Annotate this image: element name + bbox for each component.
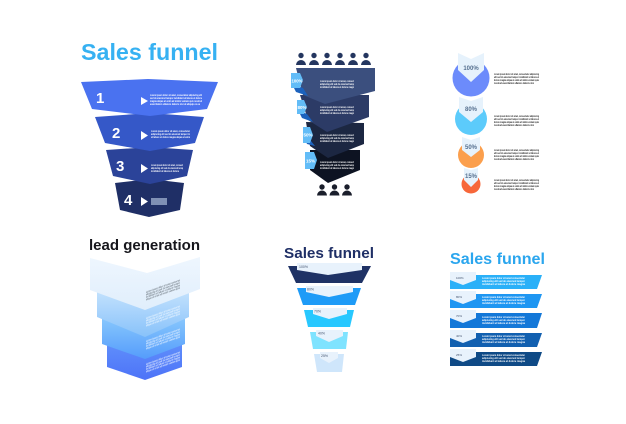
funnel step 3: [106, 147, 193, 184]
panel: numbered funnel: [81, 39, 218, 217]
icons: people bottom: [317, 184, 352, 196]
layer 1: Lorem ipsum dolor sit amet consectet: [146, 278, 180, 294]
panel: lead generation funnel: [89, 237, 200, 380]
funnel step 2: Lorem ipsum dolor sit amet, consectetur: [151, 129, 191, 133]
funnel tier 1: [296, 68, 375, 104]
tier text blocks: Lorem ipsum dolor sit amet, consect: [320, 105, 354, 109]
funnel step 3: adipiscing elit sed do eiusmod temp: [151, 166, 183, 170]
banner: 80%: adipiscing elit sed do eiusmod tempor: [482, 298, 526, 302]
banner: 40%: Lorem ipsum dolor sit amet consectetur: [482, 334, 526, 338]
layer 3: adipiscing elit sed do eiusmod tempor: [146, 330, 181, 345]
banner: 25%: Lorem ipsum dolor sit amet consectetur: [482, 353, 526, 357]
step text blocks: nostrud exercitation ullamco laboris nisi: [494, 187, 534, 191]
banner: 25%: incididunt ut labore et dolore magna: [482, 359, 525, 363]
panel: stacked banners: [450, 251, 545, 366]
badge: 100%: 100%: [292, 78, 302, 84]
funnel step 3: 3: [116, 158, 124, 175]
funnel step 3: Lorem ipsum dolor sit amet, consect: [151, 163, 183, 167]
step: 100% circle: 100%: [463, 66, 479, 72]
banner: 40%: 40%: [456, 334, 462, 338]
step text blocks: dolore magna aliqua ut enim ad minim veniam quis: [494, 120, 539, 124]
funnel tier 2: [300, 95, 369, 132]
badge: 100%: [291, 73, 308, 96]
layer 2: [97, 290, 189, 337]
step text blocks: dolore magna aliqua ut enim ad minim veniam quis: [494, 78, 539, 82]
banner: 100%: adipiscing elit sed do eiusmod tempor: [482, 279, 526, 283]
badge: 50%: [303, 127, 315, 146]
panel: circle funnel: [452, 53, 539, 194]
badge: 50%: 50%: [304, 132, 312, 138]
layer 1: incididunt ut labore et dolore magna: [146, 283, 180, 299]
tier text blocks: incididunt ut labore et dolore magn: [320, 139, 354, 143]
step: 100% circle: [452, 53, 490, 96]
banner: 70%: [450, 310, 542, 328]
layer 4: [107, 344, 182, 380]
funnel step 2: ut labore et dolore magna aliqua ut enim: [151, 135, 190, 139]
layer 3: [102, 319, 185, 359]
step text blocks: Lorem ipsum dolor sit amet, consectetur adipiscing: [494, 72, 539, 76]
tier text blocks: incididunt ut labore et dolore magn: [320, 166, 354, 170]
layer 2: incididunt ut labore et dolore magna: [146, 309, 180, 325]
funnel tier 3: [306, 122, 364, 158]
badge: 15%: 15%: [306, 158, 315, 164]
icons: people top: [296, 53, 371, 65]
layer 1: [90, 257, 200, 310]
step text blocks: Lorem ipsum dolor sit amet, consectetur adipiscing: [494, 148, 539, 152]
banner: 80%: 80%: [456, 295, 462, 299]
tier text blocks: adipiscing elit sed do eiusmod temp: [320, 108, 354, 112]
title: Sales funnel: Sales funnel: [450, 251, 545, 268]
tier text blocks: incididunt ut labore et dolore magn: [320, 85, 354, 89]
tier: 80%: 80%: [307, 288, 314, 292]
step text blocks: nostrud exercitation ullamco laboris nisi: [494, 157, 534, 161]
banner: 100%: [450, 272, 542, 289]
banner: 40%: adipiscing elit sed do eiusmod tempor: [482, 337, 526, 341]
layer 2: aliqua ut enim ad minim veniam quis: [146, 312, 180, 327]
step text blocks: nostrud exercitation ullamco laboris nisi: [494, 81, 534, 85]
funnel step 1: sed do eiusmod tempor incididunt ut labore et dolore: [150, 96, 202, 100]
title: Sales funnel: Sales funnel: [81, 39, 218, 65]
step: 15% circle: 15%: [465, 174, 478, 180]
banner: 70%: 70%: [456, 314, 462, 318]
panel: dark funnel with people: [291, 53, 375, 195]
funnel step 1: magna aliqua ut enim ad minim veniam quis nostrud: [150, 99, 202, 103]
step: 50% circle: [458, 137, 484, 168]
badge: 15%: [305, 152, 317, 169]
tier: 70%: 70%: [314, 310, 321, 314]
funnel step 4: [115, 179, 184, 217]
tier text blocks: adipiscing elit sed do eiusmod temp: [320, 82, 354, 86]
banner: 25%: adipiscing elit sed do eiusmod tempor: [482, 356, 526, 360]
banner: 70%: Lorem ipsum dolor sit amet consectetur: [482, 315, 526, 319]
title: lead generation: lead generation: [89, 237, 200, 254]
banner: 25%: 25%: [456, 353, 462, 357]
tier: 100%: 100%: [299, 265, 308, 269]
badge: 80%: [297, 100, 313, 122]
layer 2: adipiscing elit sed do eiusmod tempor: [146, 307, 181, 322]
banner: 70%: adipiscing elit sed do eiusmod tempor: [482, 318, 526, 322]
funnel tier 4: [310, 150, 360, 183]
funnel step 3: incididunt ut labore et dolore: [151, 169, 179, 173]
tier: 25%: 25%: [321, 354, 328, 358]
step text blocks: elit sed do eiusmod tempor incididunt ut labore et: [494, 117, 539, 121]
layer 2: Lorem ipsum dolor sit amet consectet: [146, 304, 180, 320]
layer 4: incididunt ut labore et dolore magna: [146, 355, 180, 371]
funnel step 2: [95, 113, 204, 151]
tier text blocks: Lorem ipsum dolor sit amet, consect: [320, 133, 354, 137]
banner: 70%: incididunt ut labore et dolore magna: [482, 321, 525, 325]
step text blocks: elit sed do eiusmod tempor incididunt ut labore et: [494, 75, 539, 79]
funnel step 1: 1: [96, 90, 104, 107]
funnel step 1: [81, 79, 218, 116]
tier text blocks: incididunt ut labore et dolore magn: [320, 111, 354, 115]
banner: 80%: Lorem ipsum dolor sit amet consectetur: [482, 295, 526, 299]
step text blocks: elit sed do eiusmod tempor incididunt ut labore et: [494, 151, 539, 155]
layer 1: aliqua ut enim ad minim veniam quis: [146, 286, 180, 301]
layer 4: Lorem ipsum dolor sit amet consectet: [146, 350, 180, 366]
step text blocks: nostrud exercitation ullamco laboris nisi: [494, 123, 534, 127]
badge: 80%: 80%: [298, 105, 306, 110]
layer 3: aliqua ut enim ad minim veniam quis: [146, 335, 180, 350]
layer 3: Lorem ipsum dolor sit amet consectet: [146, 327, 180, 343]
step text blocks: Lorem ipsum dolor sit amet, consectetur adipiscing: [494, 178, 539, 182]
tier text blocks: adipiscing elit sed do eiusmod temp: [320, 136, 354, 140]
banner: 25%: [450, 349, 542, 366]
banner: 100%: incididunt ut labore et dolore magna: [482, 282, 525, 286]
banner: 40%: incididunt ut labore et dolore magna: [482, 340, 525, 344]
banner: 80%: [450, 291, 542, 308]
tier text blocks: [320, 79, 354, 170]
tier text blocks: adipiscing elit sed do eiusmod temp: [320, 163, 354, 167]
title: Sales funnel: Sales funnel: [284, 245, 374, 262]
step text blocks: Lorem ipsum dolor sit amet, consectetur adipiscing: [494, 114, 539, 118]
step text blocks: elit sed do eiusmod tempor incididunt ut labore et: [494, 181, 539, 185]
layer 3: incididunt ut labore et dolore magna: [146, 332, 180, 348]
tier text blocks: Lorem ipsum dolor sit amet, consect: [320, 160, 354, 164]
panel: percent funnel: [284, 245, 374, 372]
step: 15% circle: [462, 168, 480, 194]
step: 80% circle: 80%: [465, 107, 478, 113]
funnel step 2: 2: [112, 125, 120, 142]
funnel step 1: Lorem ipsum dolor sit amet, consectetur adipiscing elit: [150, 93, 202, 97]
funnel step 2: adipiscing elit sed do eiusmod tempor in: [151, 132, 190, 136]
step text blocks: dolore magna aliqua ut enim ad minim veniam quis: [494, 154, 539, 158]
step: 80% circle: [455, 97, 487, 135]
funnel step 1: exercitation ullamco laboris nisi ut aliquip ex ea: [150, 102, 200, 106]
tier: 40%: 40%: [318, 332, 325, 336]
layer 4: adipiscing elit sed do eiusmod tempor: [146, 353, 181, 368]
step text blocks: dolore magna aliqua ut enim ad minim veniam quis: [494, 184, 539, 188]
step: 50% circle: 50%: [465, 145, 478, 151]
banner: 100%: 100%: [456, 276, 464, 280]
banner: 40%: [450, 330, 542, 347]
layer 1: adipiscing elit sed do eiusmod tempor: [146, 281, 181, 296]
layer 4: aliqua ut enim ad minim veniam quis: [146, 358, 180, 373]
step text blocks: [494, 72, 539, 191]
banner: 80%: incididunt ut labore et dolore magna: [482, 301, 525, 305]
banner: 100%: Lorem ipsum dolor sit amet consectetur: [482, 276, 526, 280]
tier text blocks: Lorem ipsum dolor sit amet, consect: [320, 79, 354, 83]
funnel step 4: 4: [124, 192, 133, 209]
